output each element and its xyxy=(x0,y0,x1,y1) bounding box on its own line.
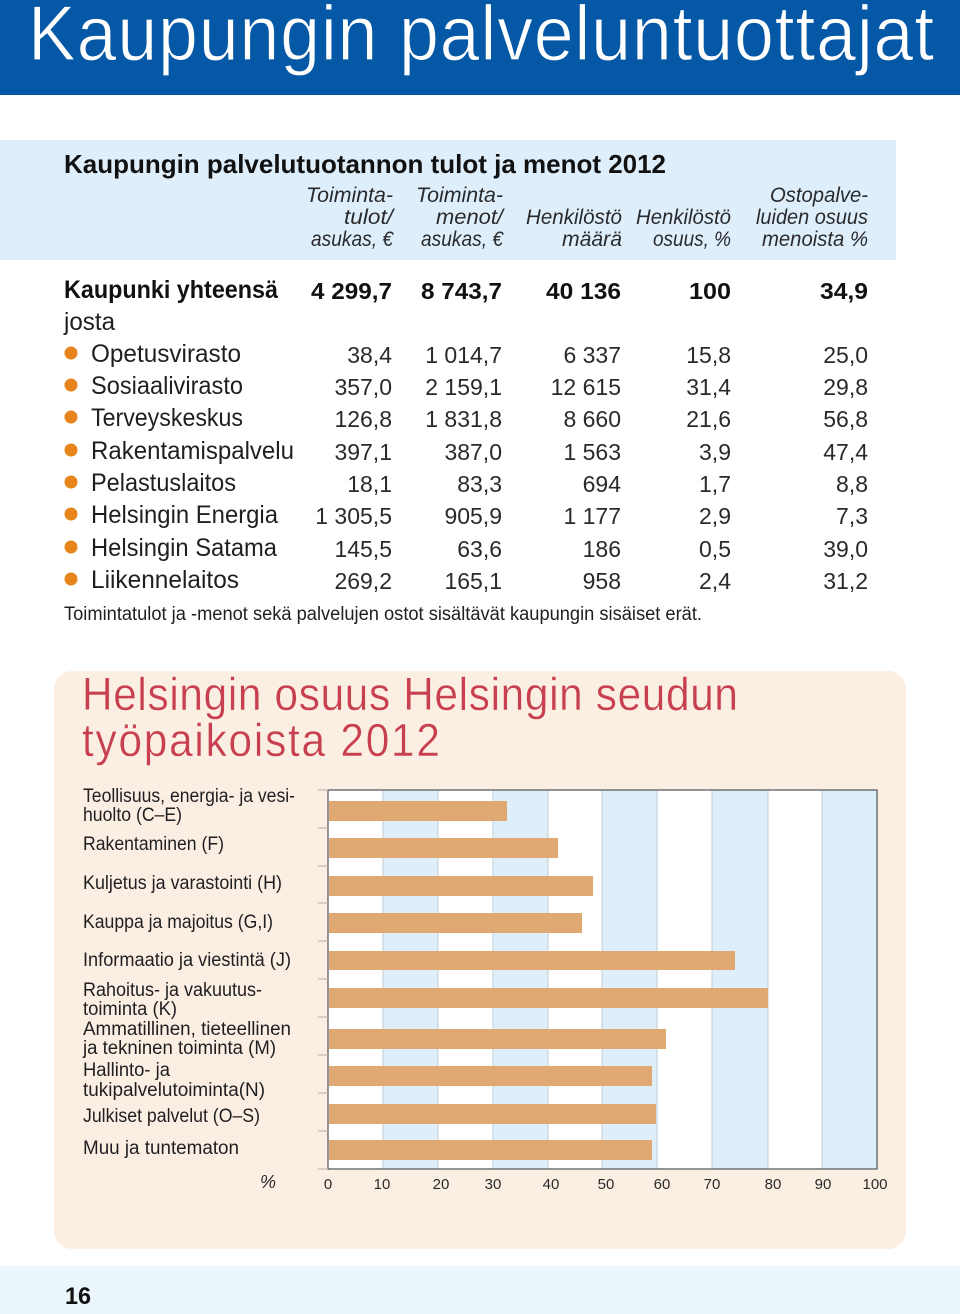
row: Opetusvirasto: 1 014,7 xyxy=(425,342,502,368)
x axis labels: 10 xyxy=(374,1176,390,1193)
row: Helsingin Energia: 7,3 xyxy=(836,503,868,529)
column header: toimintamenot: Toiminta- xyxy=(416,184,503,207)
row: Terveyskeskus: 1 831,8 xyxy=(425,406,502,432)
column header: toimintamenot xyxy=(416,184,505,251)
row: Liikennelaitos xyxy=(64,566,868,594)
column header: toimintatulot: tulot/ xyxy=(344,206,395,229)
row: Pelastuslaitos: Pelastuslaitos xyxy=(91,469,236,497)
row: Rakentamispalvelu: 1 563 xyxy=(563,439,621,465)
column header: toimintatulot: Toiminta- xyxy=(306,184,393,207)
row: Liikennelaitos: 165,1 xyxy=(444,568,502,594)
row: Sosiaalivirasto: 12 615 xyxy=(551,374,621,400)
x axis labels: 30 xyxy=(485,1176,501,1193)
row: Helsingin Satama: 39,0 xyxy=(823,536,868,562)
table rows xyxy=(63,276,868,594)
chart category labels: Kauppa ja majoitus (G,I) xyxy=(83,912,273,933)
row: Opetusvirasto: 6 337 xyxy=(563,342,621,368)
panel: table header xyxy=(0,140,896,260)
chart category labels: huolto (C–E) xyxy=(83,805,182,826)
row: Terveyskeskus xyxy=(64,404,868,432)
panel heading: työpaikoista 2012 xyxy=(82,715,440,766)
row: Opetusvirasto: Opetusvirasto xyxy=(91,340,241,368)
row label: josta: josta xyxy=(63,308,115,336)
row: Rakentamispalvelu: 387,0 xyxy=(444,439,502,465)
row: Opetusvirasto xyxy=(64,340,868,368)
row: Pelastuslaitos: 8,8 xyxy=(836,471,868,497)
chart category labels: Hallinto- ja xyxy=(83,1060,170,1081)
row: Kaupunki yhteensä: 40 136 xyxy=(546,278,621,304)
column header: toimintatulot: asukas, € xyxy=(311,228,394,251)
column header: henkilöstö osuus xyxy=(636,206,731,251)
row: Helsingin Energia: 1 305,5 xyxy=(315,503,392,529)
column header: henkilöstö määrä: määrä xyxy=(562,228,622,251)
column header: toimintatulot xyxy=(306,184,395,251)
column header: ostopalvelut: menoista % xyxy=(762,228,868,251)
column header: henkilöstö osuus: Henkilöstö xyxy=(636,206,731,229)
row: Helsingin Energia: 905,9 xyxy=(444,503,502,529)
panel: employment share xyxy=(54,669,906,1249)
x axis labels: 60 xyxy=(654,1176,670,1193)
chart category labels: Rahoitus- ja vakuutus- xyxy=(83,980,262,1001)
x axis labels: 0 xyxy=(324,1176,332,1193)
row: Sosiaalivirasto: 2 159,1 xyxy=(425,374,502,400)
row: Kaupunki yhteensä: Kaupunki yhteensä xyxy=(64,276,278,304)
x axis labels xyxy=(324,1176,888,1193)
row: Helsingin Energia: 1 177 xyxy=(563,503,621,529)
row: Rakentamispalvelu: Rakentamispalvelu xyxy=(91,437,294,465)
chart category labels: toiminta (K) xyxy=(83,999,177,1020)
bar chart xyxy=(318,790,877,1169)
row: Liikennelaitos: 31,2 xyxy=(823,568,868,594)
chart category labels: Julkiset palvelut (O–S) xyxy=(83,1106,260,1127)
row: Helsingin Energia xyxy=(64,501,868,529)
row: Kaupunki yhteensä: 34,9 xyxy=(820,278,868,304)
column header: henkilöstö osuus: osuus, % xyxy=(653,228,731,251)
row: Kaupunki yhteensä xyxy=(64,276,868,304)
chart category labels: Kuljetus ja varastointi (H) xyxy=(83,873,282,894)
row: Kaupunki yhteensä: 4 299,7 xyxy=(311,278,392,304)
row: Opetusvirasto: 38,4 xyxy=(347,342,392,368)
row: Helsingin Satama: 63,6 xyxy=(457,536,502,562)
row: Sosiaalivirasto: Sosiaalivirasto xyxy=(91,372,243,400)
chart category labels: Informaatio ja viestintä (J) xyxy=(83,950,291,971)
column header: ostopalvelut xyxy=(756,184,868,251)
row: Pelastuslaitos: 18,1 xyxy=(347,471,392,497)
axis unit label: % xyxy=(260,1172,276,1192)
row: Pelastuslaitos: 1,7 xyxy=(699,471,731,497)
x axis labels: 40 xyxy=(543,1176,559,1193)
chart category labels xyxy=(82,786,295,1159)
row: Liikennelaitos: 269,2 xyxy=(334,568,392,594)
column header: toimintamenot: asukas, € xyxy=(421,228,504,251)
row: Sosiaalivirasto: 357,0 xyxy=(334,374,392,400)
row: Liikennelaitos: Liikennelaitos xyxy=(91,566,239,594)
row: Terveyskeskus: 126,8 xyxy=(334,406,392,432)
column header: henkilöstö määrä xyxy=(526,206,622,251)
row: Sosiaalivirasto xyxy=(64,372,868,400)
x axis labels: 90 xyxy=(815,1176,831,1193)
row: Pelastuslaitos: 694 xyxy=(583,471,621,497)
row: Terveyskeskus: Terveyskeskus xyxy=(91,404,243,432)
row: Rakentamispalvelu: 3,9 xyxy=(699,439,731,465)
x axis labels: 70 xyxy=(704,1176,720,1193)
row: Helsingin Satama: 0,5 xyxy=(699,536,731,562)
row: Opetusvirasto: 25,0 xyxy=(823,342,868,368)
chart category labels: Ammatillinen, tieteellinen xyxy=(83,1019,291,1040)
x axis labels: 80 xyxy=(765,1176,781,1193)
row: Terveyskeskus: 8 660 xyxy=(563,406,621,432)
row: Pelastuslaitos xyxy=(64,469,868,497)
row: Pelastuslaitos: 83,3 xyxy=(457,471,502,497)
column header: ostopalvelut: Ostopalve- xyxy=(770,184,868,207)
row: Helsingin Satama: 145,5 xyxy=(334,536,392,562)
panel heading: Helsingin osuus Helsingin seudun xyxy=(82,669,738,720)
row: Helsingin Satama xyxy=(64,534,868,562)
column header: henkilöstö määrä: Henkilöstö xyxy=(526,206,622,229)
row: Helsingin Satama: Helsingin Satama xyxy=(91,534,277,562)
footer band xyxy=(0,1266,960,1314)
row: Helsingin Energia: Helsingin Energia xyxy=(91,501,278,529)
row: Liikennelaitos: 2,4 xyxy=(699,568,731,594)
chart category labels: Muu ja tuntematon xyxy=(83,1138,239,1159)
x axis labels: 50 xyxy=(598,1176,614,1193)
page number: 16 xyxy=(65,1283,91,1310)
row: Helsingin Energia: 2,9 xyxy=(699,503,731,529)
row: Opetusvirasto: 15,8 xyxy=(686,342,731,368)
row: Helsingin Satama: 186 xyxy=(583,536,621,562)
row: Terveyskeskus: 56,8 xyxy=(823,406,868,432)
chart category labels: tukipalvelutoiminta(N) xyxy=(83,1080,265,1101)
x axis labels: 20 xyxy=(433,1176,449,1193)
x axis labels: 100 xyxy=(862,1176,888,1193)
column header: toimintamenot: menot/ xyxy=(436,206,505,229)
column header: ostopalvelut: luiden osuus xyxy=(756,206,868,229)
row: Sosiaalivirasto: 29,8 xyxy=(823,374,868,400)
table heading: Kaupungin palvelutuotannon tulot ja menot 2012 xyxy=(64,149,666,179)
panel heading xyxy=(82,669,738,766)
row: Liikennelaitos: 958 xyxy=(583,568,621,594)
row: Sosiaalivirasto: 31,4 xyxy=(686,374,731,400)
row: Rakentamispalvelu xyxy=(64,437,868,465)
row: Rakentamispalvelu: 397,1 xyxy=(334,439,392,465)
table footnote: Toimintatulot ja -menot sekä palvelujen ostot sisältävät kaupungin sisäiset erät. xyxy=(64,604,702,625)
row: Kaupunki yhteensä: 8 743,7 xyxy=(421,278,502,304)
row: Terveyskeskus: 21,6 xyxy=(686,406,731,432)
chart category labels: ja tekninen toiminta (M) xyxy=(82,1038,276,1059)
chart category labels: Teollisuus, energia- ja vesi- xyxy=(83,786,295,807)
chart category labels: Rakentaminen (F) xyxy=(83,834,224,855)
row: Rakentamispalvelu: 47,4 xyxy=(823,439,868,465)
row: Kaupunki yhteensä: 100 xyxy=(689,278,731,304)
